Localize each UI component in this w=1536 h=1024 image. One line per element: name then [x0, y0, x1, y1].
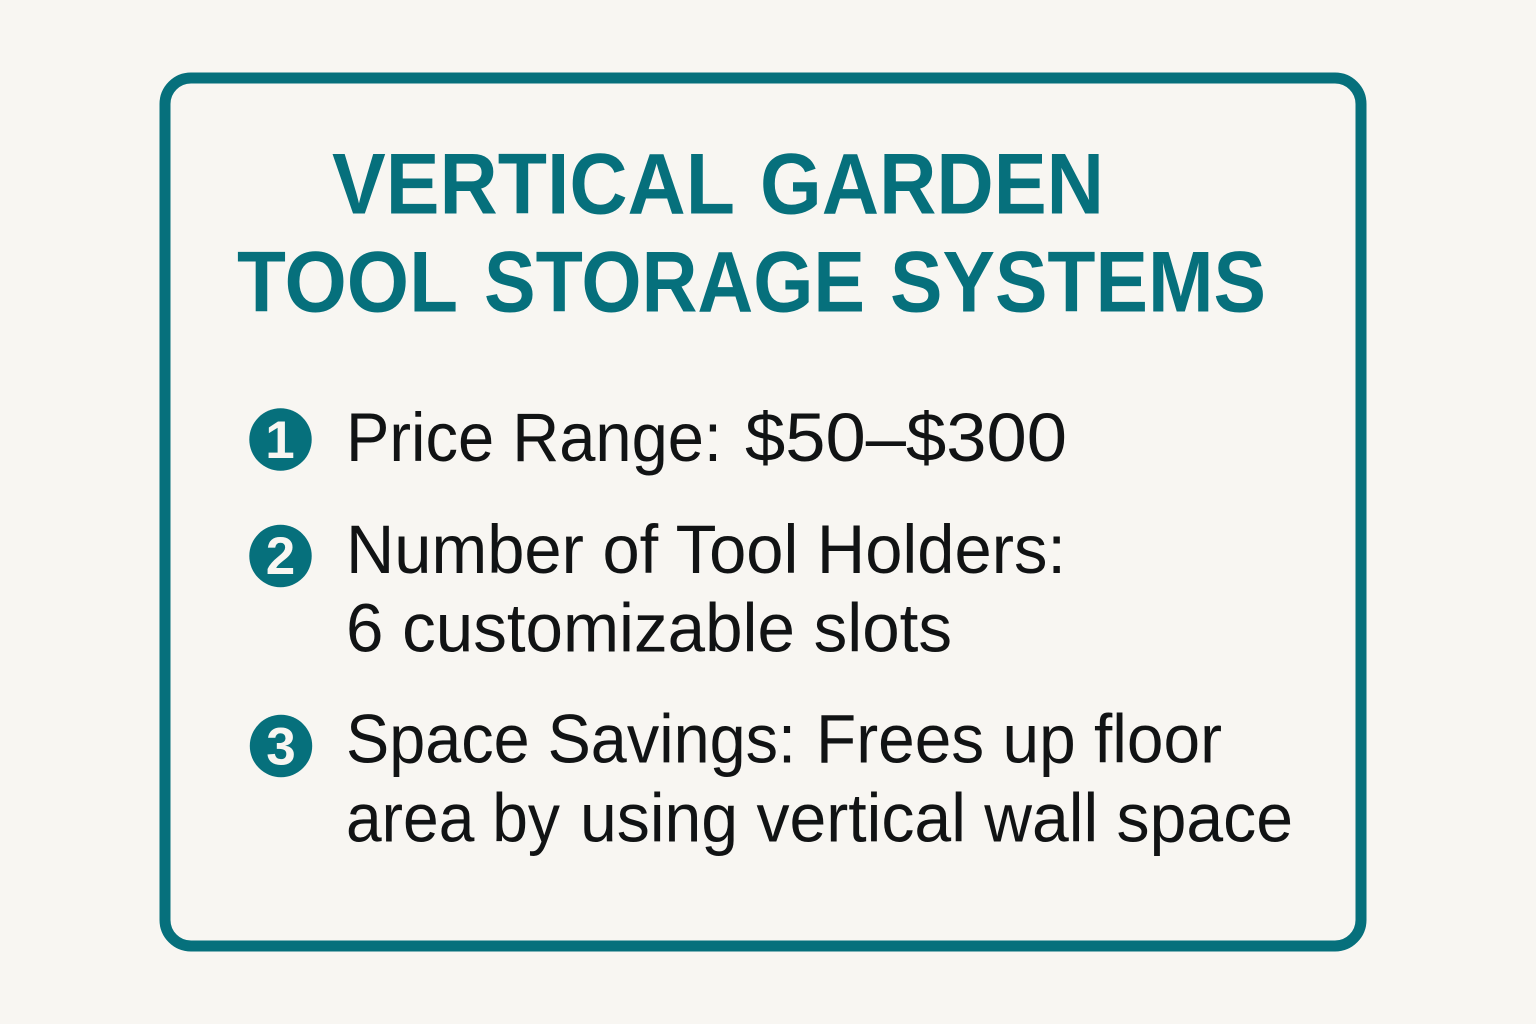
title — [237, 136, 1266, 330]
text: tool holders: 6 customizable slots — [346, 590, 952, 666]
title: TOOL — [237, 234, 458, 330]
title: GARDEN — [760, 136, 1104, 232]
title: SYSTEMS — [890, 234, 1266, 330]
text: tool holders — [346, 511, 1066, 666]
icon: number 1 badge: 1 — [265, 411, 295, 470]
panel: card frame — [165, 78, 1361, 946]
text: space savings: area by — [346, 780, 560, 856]
list item 1: price range — [249, 399, 1067, 476]
icon: number 3 badge: 3 — [266, 718, 296, 776]
icon: number 2 badge — [249, 525, 312, 587]
list item 2: tool holders — [249, 511, 1066, 666]
text: price range: $50–$300 — [745, 399, 1067, 476]
title: VERTICAL — [332, 136, 735, 232]
text: space savings — [346, 700, 1293, 856]
title: STORAGE — [484, 234, 865, 330]
text: space savings: Space Savings: — [346, 700, 796, 778]
text: price range: Price Range: — [346, 399, 722, 476]
text: space savings: Frees up floor — [816, 700, 1222, 778]
icon: number 3 badge — [250, 715, 312, 777]
icon: number 1 badge — [249, 408, 312, 471]
text: price range — [346, 399, 1067, 476]
text: space savings: using vertical wall space — [580, 780, 1293, 856]
icon: number 2 badge: 2 — [266, 527, 295, 586]
list item 3: space savings — [250, 700, 1293, 856]
text: tool holders: Number of Tool Holders: — [346, 511, 1066, 588]
